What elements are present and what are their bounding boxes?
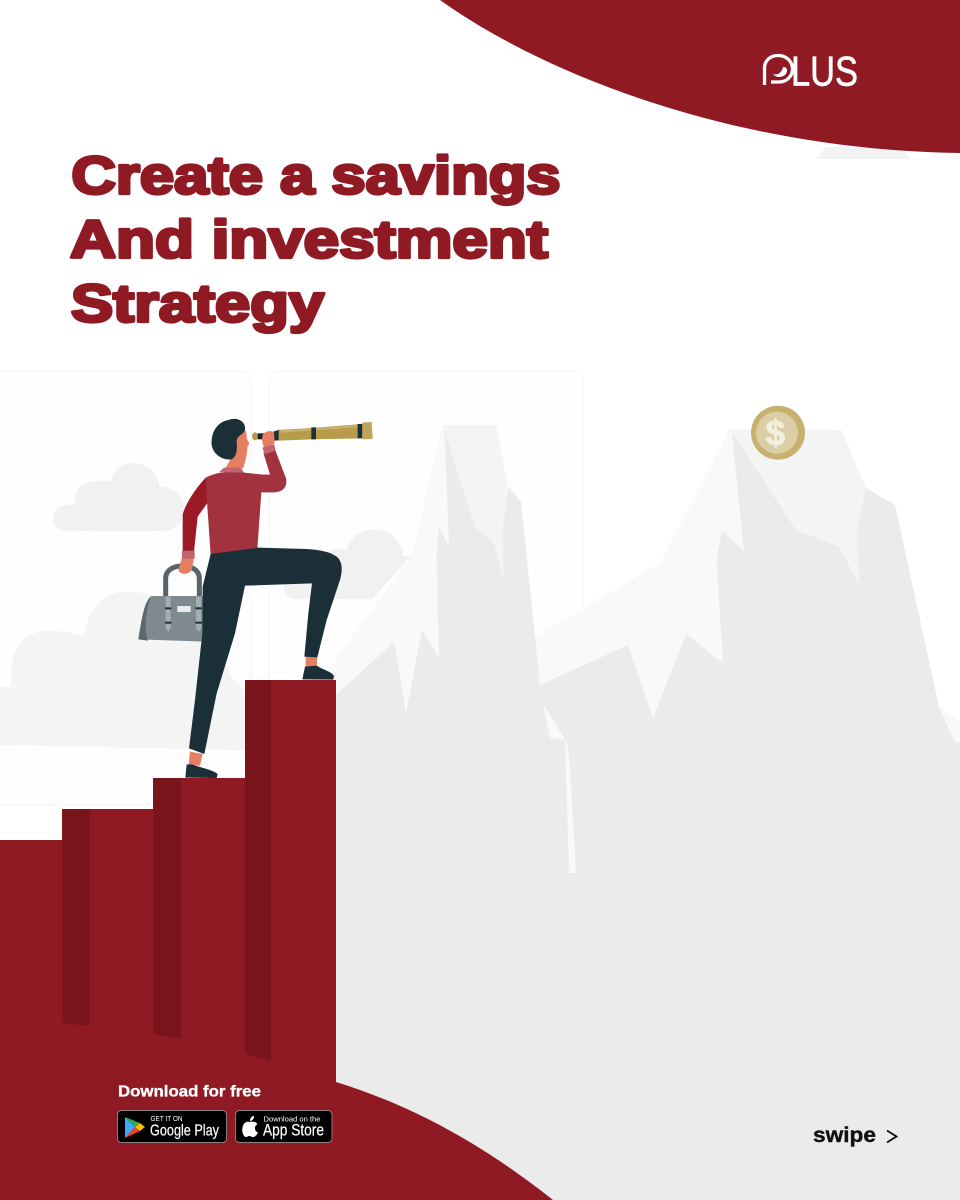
logo xyxy=(764,48,858,94)
shoes xyxy=(185,666,334,778)
cloud: large lower left xyxy=(0,592,246,751)
logo leaf xyxy=(773,67,787,77)
clouds xyxy=(0,463,411,751)
swipe label: swipe xyxy=(813,1124,876,1147)
title: And investment xyxy=(70,210,548,270)
mountain lower snow patch xyxy=(543,703,565,740)
ankles xyxy=(189,657,317,766)
title: Strategy xyxy=(71,274,325,334)
lower hand xyxy=(178,557,194,574)
mountain body xyxy=(336,430,960,1200)
cloud: behind leg xyxy=(284,529,411,599)
coin xyxy=(751,406,805,460)
title: Create a savings xyxy=(72,146,560,206)
icon: play xyxy=(125,1117,145,1138)
mountain snow strip xyxy=(565,740,576,873)
logo P mark xyxy=(764,56,792,85)
raised cuff xyxy=(262,444,276,454)
bag xyxy=(138,566,205,642)
far arm xyxy=(183,477,208,552)
mountains xyxy=(330,425,960,1200)
mountain peak shade right xyxy=(729,429,866,585)
icon: apple xyxy=(242,1116,258,1137)
mountain snow layer xyxy=(330,425,960,1200)
arrow: swipe xyxy=(887,1130,896,1142)
trousers xyxy=(189,548,342,754)
mountain right snow patch xyxy=(939,707,960,742)
Google Play badge: GET IT ON xyxy=(150,1114,182,1123)
hair and face xyxy=(212,419,249,468)
coin: $ xyxy=(766,414,785,453)
cloud: upper left xyxy=(53,463,184,531)
App Store badge: App Store xyxy=(263,1122,324,1140)
background cards xyxy=(0,371,584,805)
Google Play badge: Google Play xyxy=(150,1122,219,1140)
App Store badge: Download on the xyxy=(264,1114,320,1124)
download label: Download for free xyxy=(118,1084,261,1100)
mountain peak shade left xyxy=(442,425,507,582)
person with telescope and bag xyxy=(138,419,373,778)
title xyxy=(70,146,560,334)
collar xyxy=(219,468,245,473)
stair shadows xyxy=(62,680,271,1061)
raised hand xyxy=(262,431,275,447)
telescope xyxy=(252,422,373,441)
App Store badge xyxy=(236,1110,332,1142)
logo letters: LUS xyxy=(791,48,858,94)
red staircase base xyxy=(0,680,553,1200)
sweater xyxy=(206,449,286,555)
Google Play badge xyxy=(118,1110,226,1142)
lower cuff xyxy=(182,551,195,559)
top red curve xyxy=(440,0,960,153)
faint mountain tip under top curve xyxy=(815,147,910,159)
